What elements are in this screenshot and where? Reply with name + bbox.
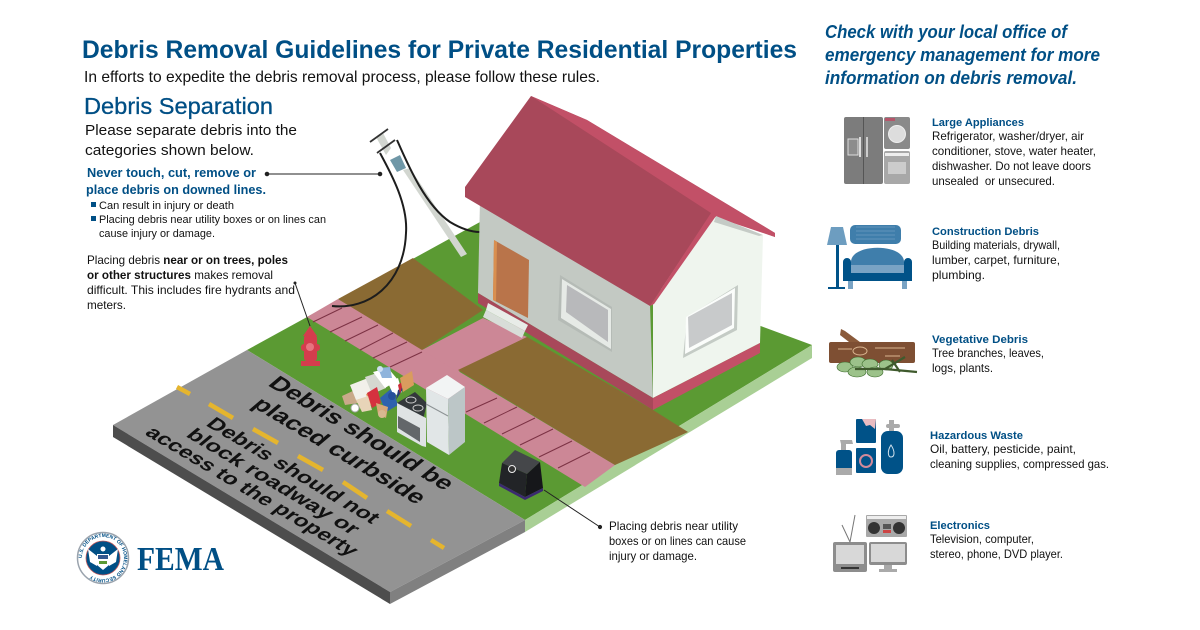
house base bbox=[478, 293, 653, 410]
text: large appliances: unsealed or unsecured. bbox=[932, 174, 1055, 188]
sidewalk bbox=[307, 299, 615, 487]
callout: utility boxes: injury or damage. bbox=[609, 549, 697, 563]
section: debris separation: categories shown below. bbox=[85, 142, 254, 159]
leader lines bbox=[265, 172, 602, 529]
text: construction debris: Construction Debris bbox=[932, 226, 1039, 238]
road label: do not block: Debris should not bbox=[201, 414, 385, 528]
icon: electronics bbox=[833, 515, 907, 572]
utility pole and wires bbox=[332, 129, 480, 306]
callout: trees and structures: difficult. This includes fire hydrants and bbox=[87, 283, 295, 297]
heading: check with local office: Check with your local office of bbox=[825, 22, 1069, 42]
text: large appliances: Refrigerator, washer/dryer, air bbox=[932, 129, 1084, 143]
text: electronics bbox=[930, 520, 1063, 561]
callout: downed lines: Placing debris near utility boxes or on lines can bbox=[99, 214, 326, 226]
steps bbox=[483, 303, 528, 338]
road bbox=[113, 350, 525, 604]
text: construction debris: Building materials, drywall, bbox=[932, 238, 1060, 252]
text: vegetative debris bbox=[932, 334, 1044, 375]
refrigerator bbox=[426, 375, 465, 455]
text: vegetative debris: Tree branches, leaves, bbox=[932, 346, 1044, 360]
heading: check with local office: emergency management for more bbox=[825, 45, 1100, 65]
section: debris separation: Please separate debris into the bbox=[85, 122, 297, 139]
FEMA wordmark: FEMA bbox=[137, 541, 224, 578]
text: large appliances bbox=[932, 117, 1096, 188]
lawn bbox=[247, 222, 812, 532]
callout: downed lines: Can result in injury or death bbox=[99, 200, 234, 212]
house walls bbox=[478, 200, 653, 398]
DHS seal: U.S. DEPARTMENT OF HOMELAND SECURITY bbox=[78, 534, 128, 582]
text: hazardous waste bbox=[930, 430, 1109, 471]
text: hazardous waste: Oil, battery, pesticide, paint, bbox=[930, 442, 1076, 456]
text: large appliances: Large Appliances bbox=[932, 117, 1024, 129]
callout: downed lines: place debris on downed lines. bbox=[86, 182, 266, 197]
title: Debris Removal Guidelines for Private Residential Properties bbox=[82, 36, 797, 64]
callout: utility boxes bbox=[609, 519, 746, 563]
section: debris separation bbox=[84, 93, 297, 159]
text: construction debris: plumbing. bbox=[932, 268, 985, 282]
debris pile bbox=[342, 366, 414, 418]
roof bbox=[465, 96, 775, 306]
callout: trees and structures: meters. bbox=[87, 298, 126, 312]
callout: trees and structures: or other structures makes removal bbox=[87, 268, 273, 282]
icon: hazardous waste bbox=[836, 419, 903, 475]
property scene bbox=[113, 96, 812, 604]
callout: trees and structures bbox=[87, 253, 295, 312]
house bbox=[465, 96, 775, 410]
road label: do not block: access to the property bbox=[140, 423, 363, 560]
callout: trees and structures: Placing debris near or on trees, poles bbox=[87, 253, 288, 267]
text: electronics: Television, computer, bbox=[930, 532, 1034, 546]
road label: curbside bbox=[247, 372, 461, 508]
door bbox=[493, 240, 529, 318]
text: vegetative debris: logs, plants. bbox=[932, 361, 993, 375]
fire hydrant bbox=[301, 326, 320, 366]
text: hazardous waste: cleaning supplies, compressed gas. bbox=[930, 457, 1109, 471]
callout: downed lines: cause injury or damage. bbox=[99, 228, 215, 240]
text: large appliances: dishwasher. Do not leave doors bbox=[932, 159, 1091, 173]
icon: construction debris bbox=[827, 225, 912, 289]
road label: do not block bbox=[140, 414, 385, 560]
road label: do not block: block roadway or bbox=[181, 425, 365, 539]
icon: large appliances bbox=[844, 117, 910, 184]
callout: utility boxes: Placing debris near utility bbox=[609, 519, 738, 533]
windows bbox=[558, 275, 612, 352]
stove bbox=[397, 392, 427, 447]
text: large appliances: conditioner, stove, water heater, bbox=[932, 144, 1096, 158]
icon: vegetative debris bbox=[829, 329, 917, 377]
callout: downed lines bbox=[86, 165, 326, 240]
subtitle: In efforts to expedite the debris removal process, please follow these rules. bbox=[84, 69, 600, 86]
section: debris separation: Debris Separation bbox=[84, 93, 273, 119]
road label: curbside: placed curbside bbox=[247, 393, 433, 508]
text: electronics: stereo, phone, DVD player. bbox=[930, 547, 1063, 561]
text: construction debris bbox=[932, 226, 1060, 282]
callout: downed lines: Never touch, cut, remove or bbox=[87, 165, 256, 180]
text: construction debris: lumber, carpet, furniture, bbox=[932, 253, 1060, 267]
callout: utility boxes: boxes or on lines can cause bbox=[609, 534, 746, 548]
text: electronics: Electronics bbox=[930, 520, 990, 532]
heading: check with local office: information on debris removal. bbox=[825, 68, 1077, 88]
heading: check with local office bbox=[825, 22, 1100, 88]
road label: curbside: Debris should be bbox=[263, 372, 461, 494]
utility box bbox=[499, 450, 543, 500]
road dashes bbox=[177, 387, 444, 548]
text: hazardous waste: Hazardous Waste bbox=[930, 430, 1023, 442]
text: vegetative debris: Vegetative Debris bbox=[932, 334, 1028, 346]
dirt plots bbox=[338, 258, 688, 465]
